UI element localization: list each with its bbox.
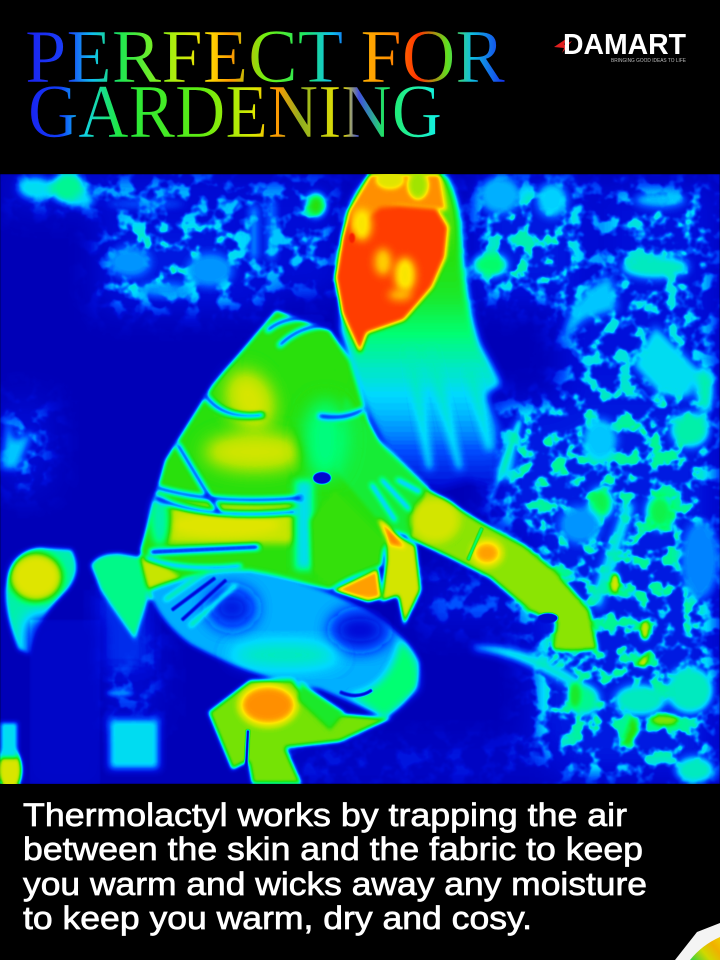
lower leg [208,680,392,784]
title: PERFECT FOR [25,15,505,99]
logo: Damart: DAMART [563,29,686,61]
caption text [23,797,647,936]
face [335,171,448,353]
logo: Damart: BRINGING GOOD IDEAS TO LIFE [611,58,687,64]
foliage speckle [0,172,720,784]
sweater stripes [147,318,420,568]
caption text: between the skin and the fabric to keep [23,831,643,867]
stump and pot left [0,547,160,792]
title: GARDENING [28,70,442,154]
caption text: you warm and wicks away any moisture [23,866,647,902]
caption text: Thermolactyl works by trapping the air [23,797,627,833]
title [25,15,505,154]
foliage blobs [0,172,720,784]
small dark gap [313,472,331,484]
leaf highlights [490,420,679,745]
page curl corner [675,923,720,960]
caption text: to keep you warm, dry and cosy. [23,900,532,936]
hair [340,174,503,490]
blue trousers thigh [148,570,420,718]
sweater [140,310,428,602]
arm and hand [378,487,598,652]
thermal photo of gardener [0,171,720,792]
